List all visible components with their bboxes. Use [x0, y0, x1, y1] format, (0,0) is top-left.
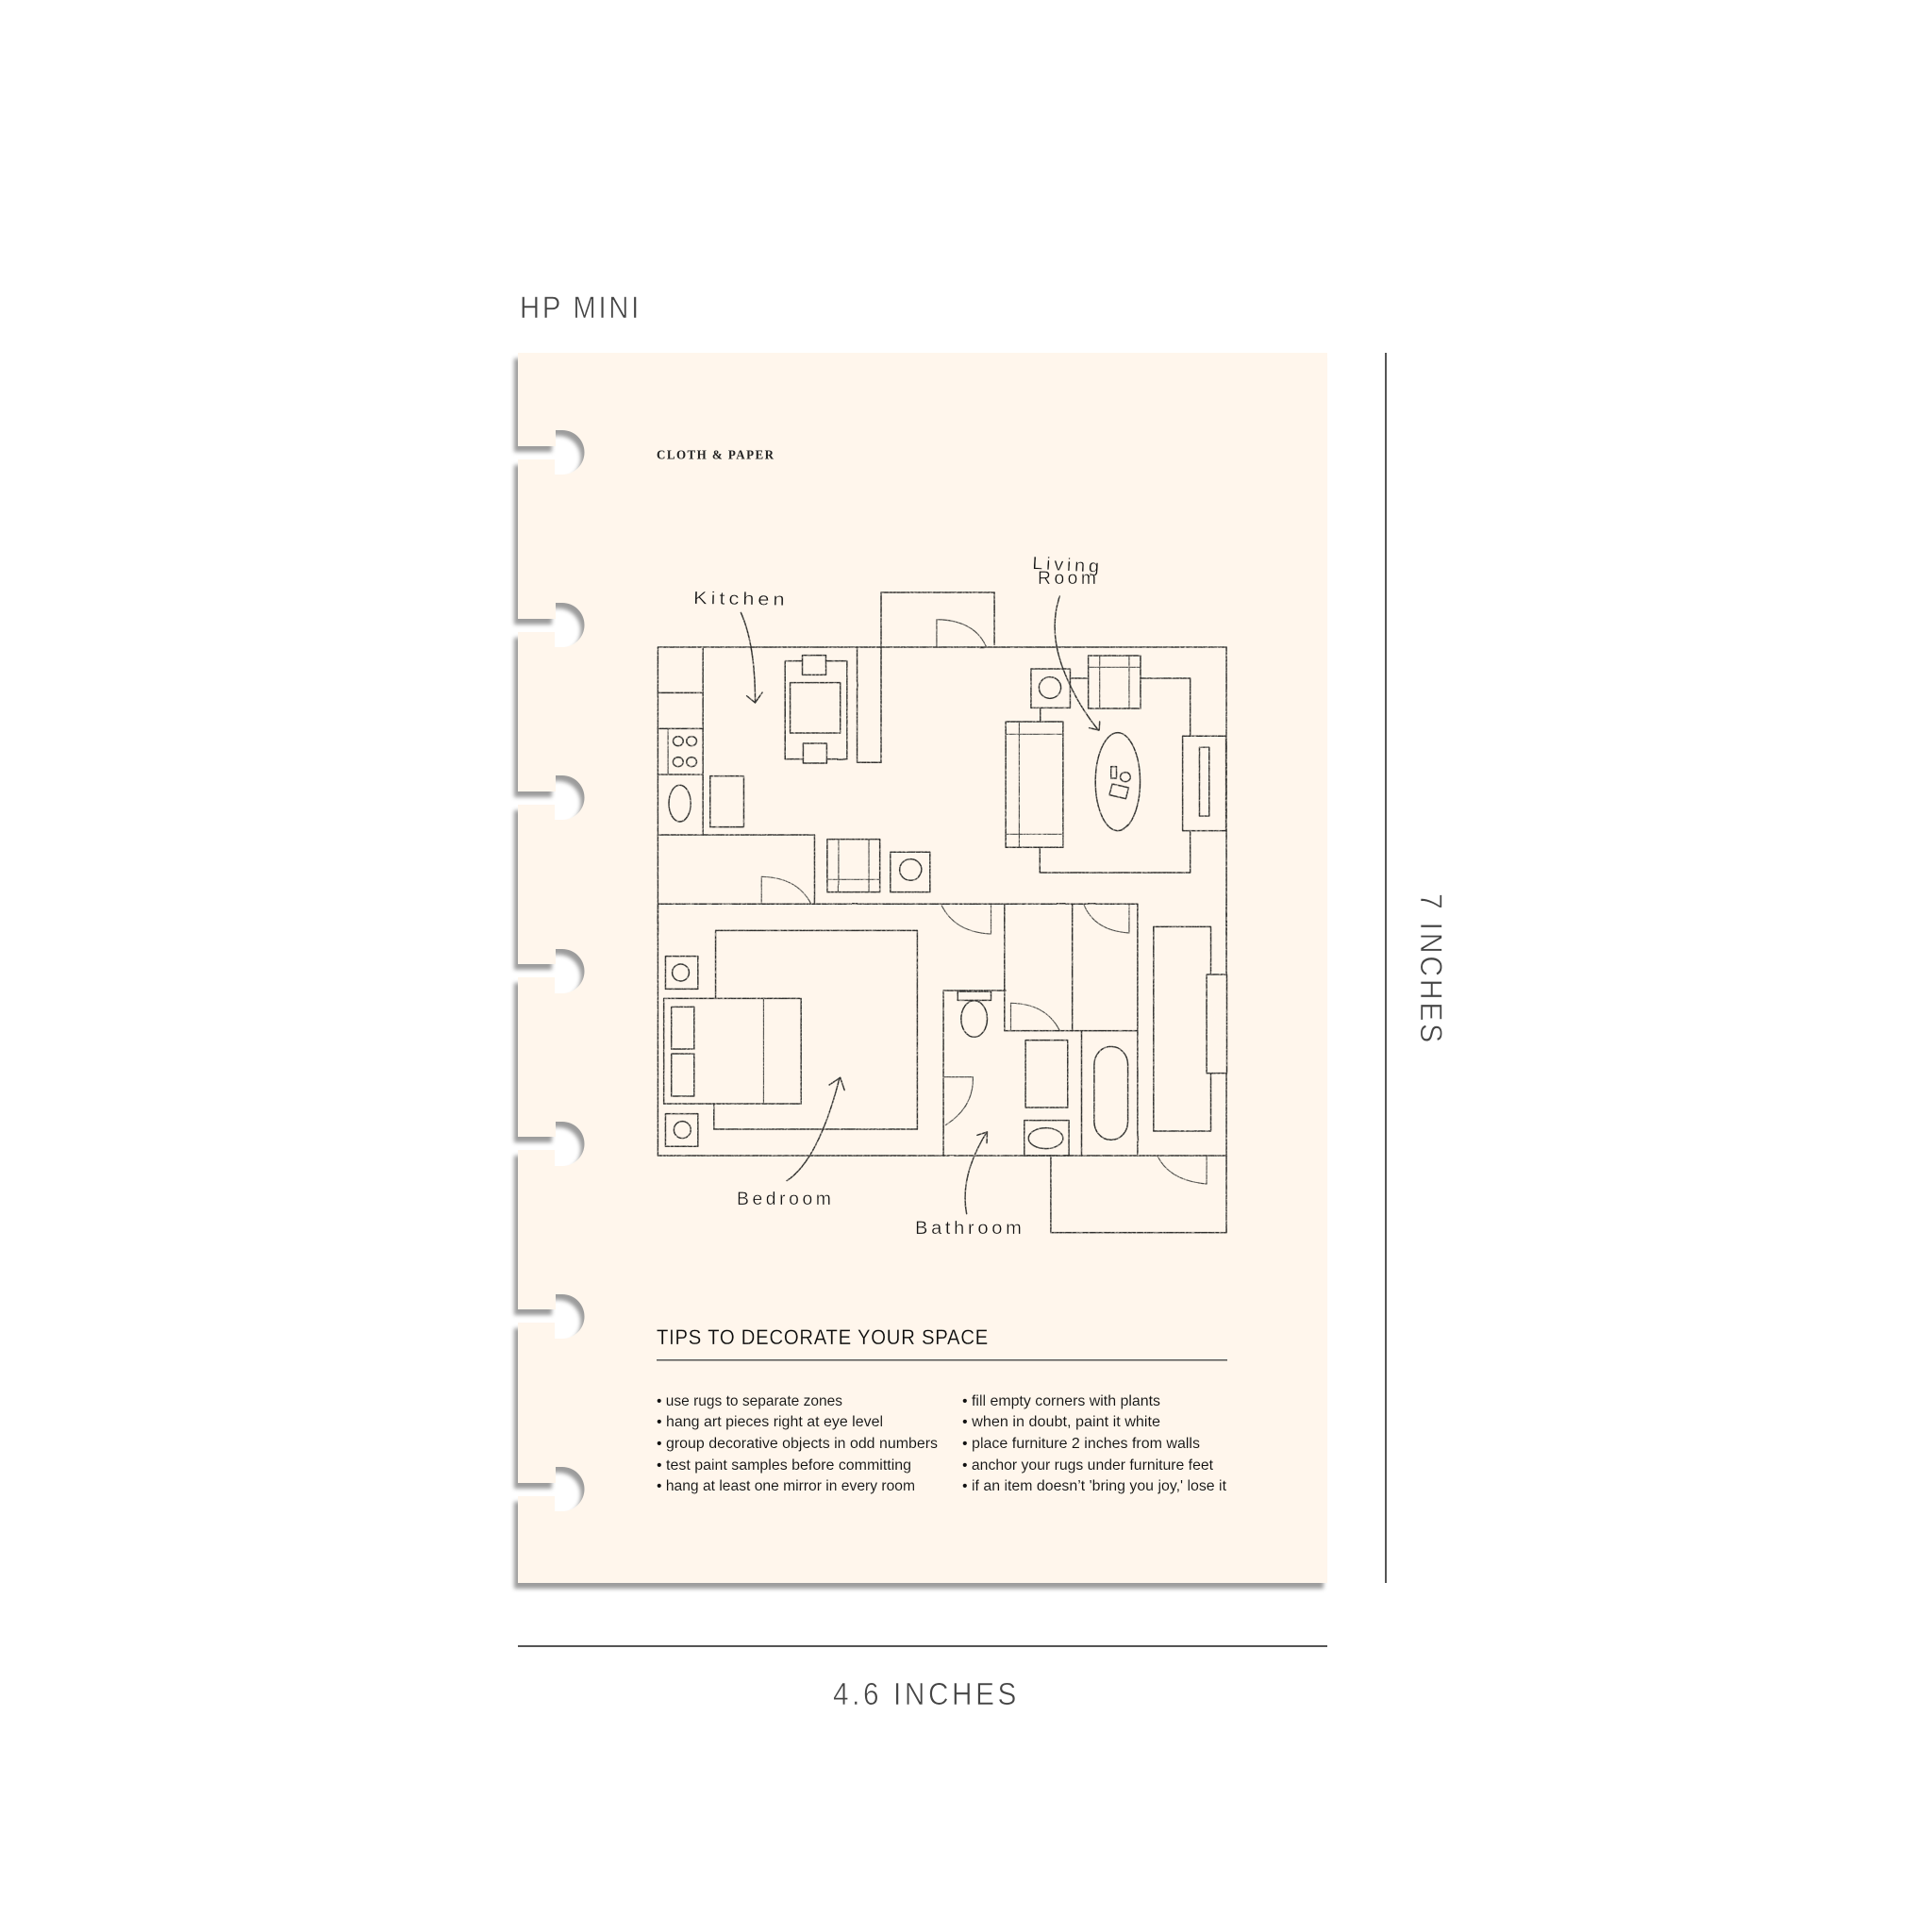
tips list: right column: • place furniture 2 inches from walls: [962, 1436, 1200, 1452]
tips list: left column: [657, 1393, 938, 1494]
dimension label: 4.6 inches: 4.6 INCHES: [833, 1676, 1020, 1711]
tips list: left column: • group decorative objects in odd numbers: [657, 1436, 938, 1452]
closet furniture: [1154, 926, 1226, 1131]
tips list: left column: • hang at least one mirror in every room: [657, 1478, 915, 1494]
dining table and chairs: [785, 656, 847, 763]
tips list: right column: • if an item doesn’t 'bring you joy,' lose it: [962, 1478, 1227, 1494]
living room furniture: [1006, 656, 1226, 873]
brand: Cloth & Paper: CLOTH & PAPER: [657, 447, 775, 462]
kitchen counters and appliances: [658, 647, 743, 835]
title: HP Mini: HP MINI: [520, 291, 641, 325]
arrow: bathroom: [965, 1132, 987, 1214]
arrow: kitchen: [741, 612, 762, 703]
label: bedroom: Bedroom: [737, 1190, 834, 1209]
tips list: left column: • use rugs to separate zones: [657, 1393, 842, 1409]
label: living room: Living: [1032, 554, 1103, 577]
label: living room: [1032, 554, 1103, 589]
label: bathroom: Bathroom: [915, 1219, 1024, 1239]
tips list: right column: [962, 1393, 1227, 1494]
label: living room: Room: [1038, 569, 1100, 589]
tips list: left column: • test paint samples before committing: [657, 1457, 911, 1474]
tips list: right column: • anchor your rugs under furniture feet: [962, 1457, 1214, 1474]
balcony: [1051, 1156, 1226, 1233]
dimension line: width: [518, 1645, 1327, 1647]
label: kitchen: Kitchen: [693, 589, 789, 610]
dimension line: height: [1385, 353, 1387, 1583]
armchair and side table: [827, 840, 930, 892]
tips list: right column: • fill empty corners with plants: [962, 1393, 1160, 1409]
divider under heading: [657, 1359, 1227, 1360]
lower floor plan: walls and doors: [658, 904, 1226, 1156]
panel: planner page with binder notches: [518, 353, 1327, 1583]
arrow: living room: [1055, 596, 1100, 730]
upper floor plan: walls: [658, 592, 1226, 934]
tips list: right column: • when in doubt, paint it white: [962, 1414, 1160, 1430]
dimension label: 7 inches: 7 INCHES: [1414, 893, 1448, 1045]
bedroom furniture: [664, 930, 917, 1146]
arrow: bedroom: [787, 1077, 844, 1181]
floor plan: [658, 592, 1226, 1233]
heading: tips: TIPS TO DECORATE YOUR SPACE: [657, 1325, 989, 1349]
bathroom fixtures: [958, 991, 1128, 1156]
tips list: left column: • hang art pieces right at eye level: [657, 1414, 883, 1430]
